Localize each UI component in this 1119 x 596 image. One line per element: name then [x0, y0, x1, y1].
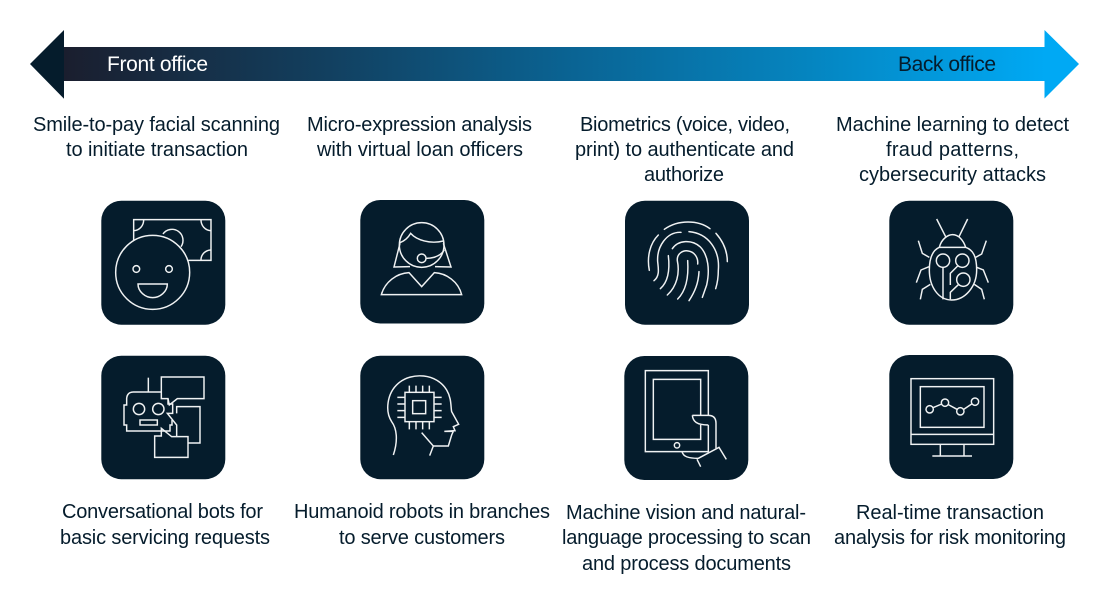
text: micro-expression: Micro-expression analysis	[307, 114, 532, 136]
text: machine learning: cybersecurity attacks	[859, 164, 1046, 186]
text: smile-to-pay	[33, 114, 280, 161]
text: machine vision: language processing to scan	[562, 527, 811, 549]
arrow: front office to back office	[30, 30, 1079, 99]
text: biometrics: print) to authenticate and	[575, 139, 794, 161]
arrow: front office to back office: Front office	[107, 53, 208, 76]
icon: robot with speech bubbles	[124, 377, 204, 457]
text: micro-expression	[307, 114, 532, 161]
text: conversational bots	[60, 501, 270, 549]
text: humanoid robots	[294, 501, 550, 549]
icon: monitor with line chart	[911, 379, 994, 456]
text: machine vision: Machine vision and natural-	[566, 502, 806, 524]
text: conversational bots: basic servicing requests	[60, 527, 270, 549]
text: machine learning: Machine learning to detect	[836, 114, 1069, 136]
text: machine learning	[836, 114, 1069, 186]
text: machine vision: and process documents	[582, 553, 791, 575]
text: real-time analysis: analysis for risk monitoring	[834, 527, 1066, 549]
text: biometrics	[575, 114, 794, 186]
panel: fraud detection icon	[889, 201, 1013, 325]
icon: head with chip	[388, 376, 459, 456]
text: smile-to-pay: to initiate transaction	[66, 139, 248, 161]
icon: headset agent	[381, 223, 462, 295]
text: machine learning: fraud patterns,	[886, 139, 1019, 161]
panel: fingerprint icon	[625, 201, 749, 325]
text: real-time analysis: Real-time transaction	[856, 502, 1044, 524]
text: micro-expression: with virtual loan officers	[316, 139, 523, 161]
text: machine vision	[562, 502, 811, 575]
panel: virtual loan officer icon	[360, 200, 484, 324]
panel: facial scanning icon	[101, 201, 225, 325]
text: real-time analysis	[834, 502, 1066, 549]
icon: smiling face and banknote	[116, 220, 211, 309]
icon: circuit bug	[916, 219, 988, 300]
text: humanoid robots: Humanoid robots in branches	[294, 501, 550, 523]
panel: conversational bots icon	[101, 356, 225, 479]
text: conversational bots: Conversational bots for	[62, 501, 263, 523]
text: smile-to-pay: Smile-to-pay facial scanning	[33, 114, 280, 136]
icon: hand holding tablet	[645, 371, 726, 467]
arrow: front office to back office: Back office	[898, 53, 996, 76]
panel: machine vision icon	[624, 356, 748, 480]
icon: fingerprint	[648, 222, 727, 301]
text: biometrics: authorize	[644, 164, 724, 186]
text: humanoid robots: to serve customers	[339, 527, 505, 549]
panel: risk monitoring icon	[889, 355, 1013, 479]
text: biometrics: Biometrics (voice, video,	[580, 114, 790, 136]
panel: humanoid robot icon	[360, 356, 484, 479]
